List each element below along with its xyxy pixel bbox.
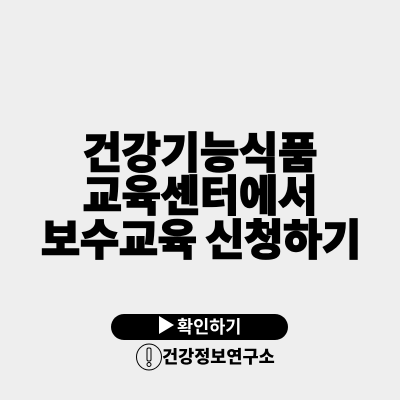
source label xyxy=(136,344,275,370)
button: confirm xyxy=(111,314,288,340)
icon: exclamation circle xyxy=(136,344,162,370)
button label: 확인하기 xyxy=(177,314,241,339)
title: 교육센터에서 xyxy=(83,163,317,224)
icon: play arrow xyxy=(159,316,174,334)
title: 건강기능식품 xyxy=(83,120,317,181)
title: 보수교육 신청하기 xyxy=(41,207,361,268)
source name: 건강정보연구소 xyxy=(162,344,275,369)
title xyxy=(41,120,361,268)
